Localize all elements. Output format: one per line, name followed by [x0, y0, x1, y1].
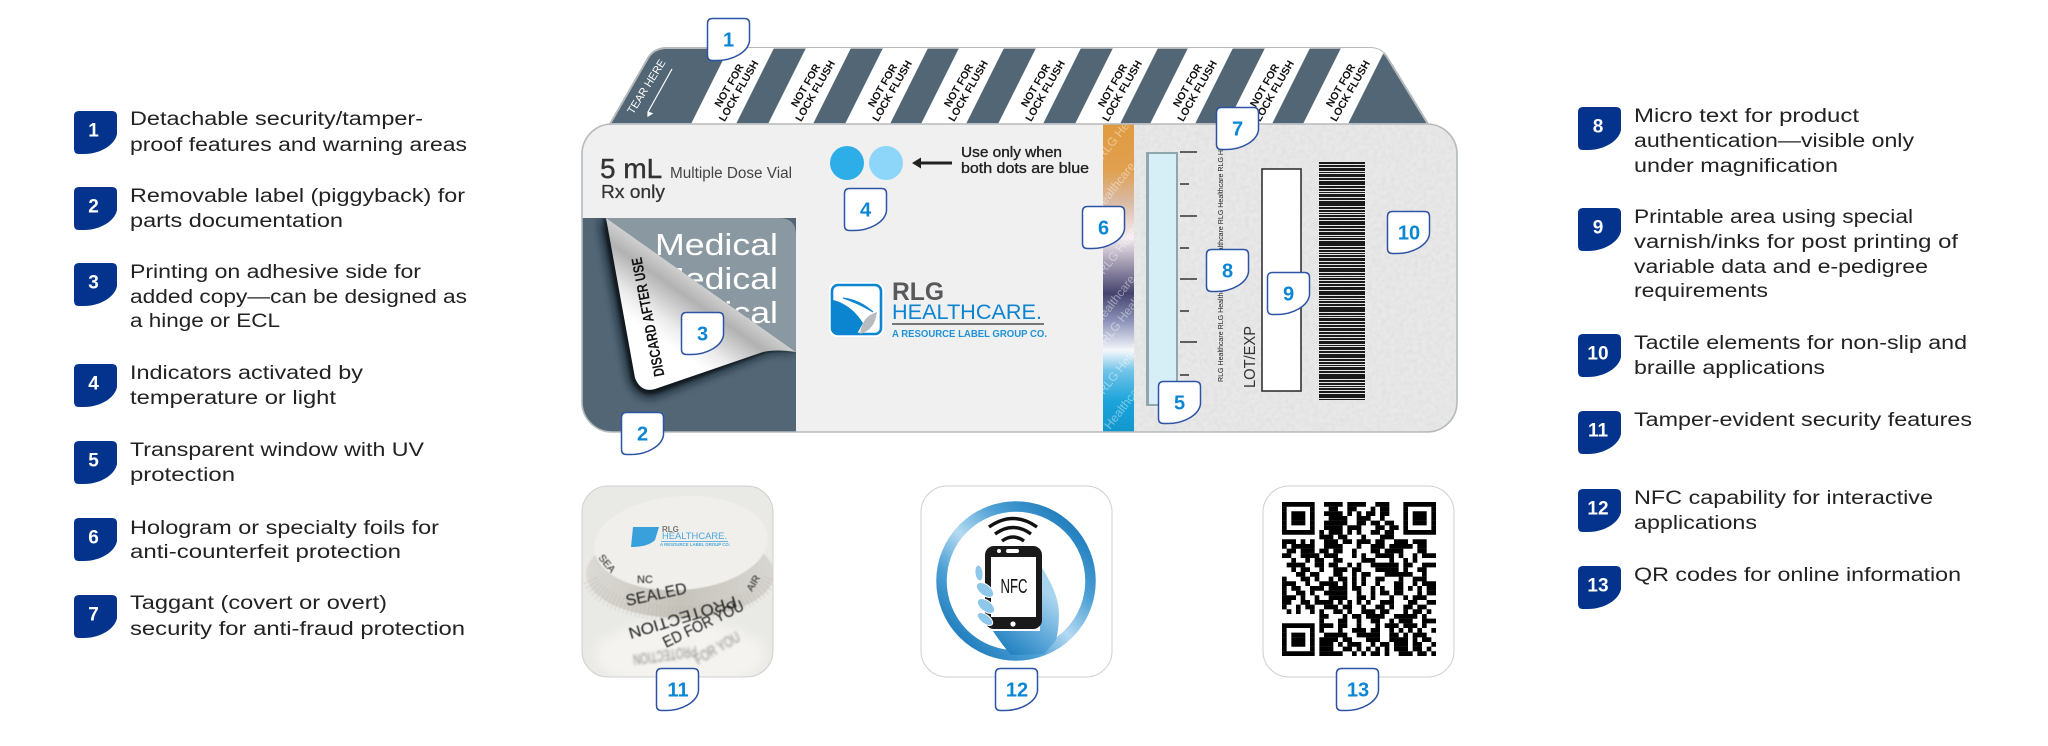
RLG Healthcare logo: RLG: [892, 278, 944, 306]
tile: tamper-evident cap photo: [582, 486, 774, 689]
legend item 3: 3: [88, 272, 99, 294]
callout 8: [1206, 250, 1248, 292]
callout 12: [996, 668, 1038, 710]
panel: hologram foil strip: Healthcare: [1091, 272, 1138, 327]
legend item 13: [1578, 565, 1961, 609]
icon: logo mark: [829, 282, 884, 337]
label outline: [582, 124, 1457, 432]
vial size text: [600, 153, 792, 202]
legend item 13: 13: [1587, 576, 1609, 596]
indicator instructions: both dots are blue: [961, 161, 1089, 177]
legend item 1: proof features and warning areas: [130, 135, 467, 156]
legend item 7: Taggant (covert or overt): [130, 593, 387, 614]
legend item 9: [1578, 207, 1959, 302]
panel: hologram foil strip: Healthcare: [1091, 159, 1138, 214]
legend item 4: [74, 363, 364, 409]
legend item 3: [74, 262, 467, 332]
legend item 6: Hologram or specialty foils for: [130, 518, 440, 539]
LOT/EXP printable area: LOT/EXP: [1242, 326, 1259, 388]
panel: hologram foil strip: RLG Healthcare: [1097, 270, 1162, 347]
callout 1: [708, 18, 750, 60]
legend item 9: variable data and e-pedigree: [1634, 257, 1928, 278]
callout 5: [1158, 382, 1200, 424]
legend item 4: 4: [88, 374, 99, 394]
tamper film printed text: [596, 553, 763, 652]
tamper film printed text: ED FOR YOU: [660, 598, 747, 652]
legend item 11: [1578, 410, 1972, 454]
callout 11: 11: [667, 680, 689, 702]
warning text: NOT FOR: [1248, 62, 1282, 109]
warning text: LOCK FLUSH: [1023, 59, 1068, 124]
arrow: indicator: [912, 158, 952, 168]
legend item 10: [1578, 333, 1967, 379]
legend item 3: a hinge or ECL: [130, 311, 280, 332]
callout 9: 9: [1283, 284, 1294, 306]
callout 13: 13: [1347, 680, 1369, 702]
legend item 9: requirements: [1634, 281, 1768, 302]
transparent window: [1146, 152, 1197, 406]
callout 6: 6: [1098, 218, 1109, 240]
micro text: RLG Healthcare RLG Healthcare RLG Healthcare RLG Healthcare RLG H: [1216, 150, 1225, 382]
vial size text: Rx only: [601, 182, 665, 202]
legend item 9: Printable area using special: [1634, 207, 1913, 228]
panel: piggyback label: [582, 218, 796, 432]
legend item 12: [1578, 488, 1933, 534]
legend: right column: [1578, 106, 1972, 609]
callout 9: [1268, 272, 1310, 314]
tamper film printed text: AIR: [745, 574, 763, 594]
tile: NFC icon: [921, 486, 1112, 677]
warning text: LOCK FLUSH: [1175, 59, 1220, 124]
legend item 12: applications: [1634, 513, 1757, 534]
legend item 2: [74, 186, 466, 232]
tamper film printed text: SEA: [596, 553, 617, 576]
hand palm: [993, 566, 1059, 655]
warning text: NOT FOR: [1171, 62, 1205, 109]
legend item 12: 12: [1587, 498, 1609, 520]
callout 2: [622, 412, 664, 454]
callout 4: [844, 188, 886, 230]
cap logo: A RESOURCE LABEL GROUP CO.: [660, 542, 730, 547]
legend item 10: braille applications: [1634, 358, 1825, 379]
callout 5: 5: [1174, 392, 1185, 414]
warning text: NOT FOR: [789, 62, 823, 109]
legend item 5: Transparent window with UV: [130, 440, 424, 461]
NFC waves: [989, 518, 1037, 541]
RLG Healthcare logo: A RESOURCE LABEL GROUP CO.: [892, 328, 1047, 340]
panel: hologram foil strip: RLG Healthcare: [1095, 200, 1160, 277]
tile: tamper-evident cap photo: PROTECTION: [632, 642, 698, 668]
warning text: NOT FOR: [942, 62, 976, 109]
tear-off tab with warning stripes: [610, 48, 1428, 124]
indicator dots: [830, 146, 903, 180]
tile: QR code: [1263, 486, 1454, 677]
legend item 13: QR codes for online information: [1634, 565, 1961, 586]
tamper film printed text: NC: [637, 574, 653, 586]
legend item 5: protection: [130, 465, 235, 486]
tamper film printed text: PROTECTION: [626, 592, 738, 641]
legend item 11: Tamper-evident security features: [1634, 410, 1972, 431]
indicator instructions: [961, 145, 1089, 177]
phone: NFC: [1000, 576, 1028, 598]
panel: hologram foil strip: Healthcare: [1101, 377, 1148, 432]
panel: tactile textured area: [1134, 124, 1457, 432]
callout 2: 2: [637, 424, 648, 446]
cap logo: HEALTHCARE.: [662, 531, 727, 541]
warning text: LOCK FLUSH: [717, 59, 761, 124]
legend item 3: Printing on adhesive side for: [130, 262, 422, 283]
warning text: NOT FOR: [1324, 62, 1358, 109]
warning text: NOT FOR: [866, 62, 900, 109]
legend item 8: under magnification: [1634, 156, 1838, 177]
callout 13: [1336, 668, 1378, 710]
legend item 1: [74, 109, 467, 156]
warning text: LOCK FLUSH: [870, 59, 915, 124]
legend item 2: 2: [88, 196, 99, 218]
callout 10: 10: [1398, 222, 1420, 244]
product name repeated: Medical: [655, 261, 778, 296]
callout 3: 3: [697, 324, 708, 346]
callout 12: 12: [1006, 680, 1028, 702]
legend item 10: 10: [1587, 344, 1609, 364]
warning text: LOCK FLUSH: [1252, 59, 1297, 124]
RLG Healthcare logo: HEALTHCARE.: [892, 301, 1042, 324]
product name repeated: Medical: [655, 227, 778, 262]
NFC ring: [942, 506, 1090, 656]
callout 11: [656, 668, 698, 710]
legend item 3: added copy—can be designed as: [130, 287, 467, 308]
legend item 2: Removable label (piggyback) for: [130, 186, 466, 207]
legend item 8: Micro text for product: [1634, 106, 1860, 127]
legend: left column: [74, 109, 467, 640]
legend item 4: temperature or light: [130, 388, 337, 409]
tile: tamper-evident cap photo: FOR YOU: [692, 629, 743, 668]
LOT/EXP printable area: [1242, 169, 1301, 391]
callout 1: 1: [723, 30, 734, 52]
RLG Healthcare logo: [829, 278, 1047, 340]
legend item 8: 8: [1593, 116, 1603, 138]
callout 7: [1216, 108, 1258, 150]
legend item 6: [74, 518, 440, 563]
legend item 11: 11: [1588, 420, 1608, 442]
phone: [985, 546, 1042, 629]
legend item 1: 1: [88, 120, 99, 142]
warning text: NOT FOR: [1096, 62, 1130, 109]
panel: hologram foil strip: [1103, 124, 1134, 432]
warning text: [707, 53, 1373, 124]
callout 6: [1082, 206, 1124, 248]
legend item 4: Indicators activated by: [130, 363, 364, 384]
warning text: LOCK FLUSH: [793, 59, 838, 124]
legend item 7: 7: [88, 604, 99, 626]
panel: hologram foil strip: RLG Healthcare: [1094, 85, 1159, 162]
cap logo: RLG: [662, 525, 679, 534]
legend item 7: security for anti-fraud protection: [130, 619, 465, 640]
legend item 12: NFC capability for interactive: [1634, 488, 1933, 509]
product name repeated: Medical: [655, 295, 778, 330]
legend item 1: Detachable security/tamper-: [130, 109, 423, 130]
arrow: tear direction: [648, 69, 672, 116]
legend item 2: parts documentation: [130, 211, 343, 232]
tear here text: TEAR HERE: [625, 58, 669, 116]
callout 10: [1388, 212, 1430, 254]
callout 4: 4: [860, 200, 872, 222]
legend item 5: 5: [88, 450, 99, 472]
tamper film printed text: SEALED: [624, 580, 688, 610]
product name repeated: [658, 233, 776, 324]
legend item 8: [1578, 106, 1915, 177]
legend item 9: varnish/inks for post printing of: [1634, 232, 1959, 253]
cap logo: [631, 525, 730, 547]
vial size text: 5 mL: [600, 153, 662, 184]
warning text: LOCK FLUSH: [1100, 59, 1145, 124]
callout 3: [682, 312, 724, 354]
main vial label: [581, 123, 1458, 433]
window scale ticks: [1180, 152, 1197, 375]
legend item 7: [74, 593, 465, 640]
legend item 8: authentication—visible only: [1634, 131, 1915, 152]
legend item 10: Tactile elements for non-slip and: [1634, 333, 1967, 354]
legend item 6: anti-counterfeit protection: [130, 542, 401, 563]
callout 7: 7: [1232, 118, 1243, 140]
barcode: [1319, 162, 1365, 400]
peeled corner flap: [606, 218, 796, 390]
legend item 6: 6: [88, 528, 99, 548]
indicator instructions: Use only when: [961, 145, 1062, 161]
panel: hologram foil strip: RLG Healthcare: [1095, 320, 1160, 397]
vial size text: Multiple Dose Vial: [670, 165, 792, 182]
warning text: LOCK FLUSH: [946, 59, 991, 124]
legend item 9: 9: [1593, 218, 1603, 238]
warning text: NOT FOR: [1019, 62, 1053, 109]
warning text: NOT FOR: [712, 62, 747, 109]
legend item 5: [74, 440, 424, 486]
warning text: LOCK FLUSH: [1328, 59, 1373, 124]
peeled corner flap: DISCARD AFTER USE: [629, 256, 668, 378]
fingers: [974, 565, 997, 628]
callout 8: 8: [1222, 260, 1233, 282]
